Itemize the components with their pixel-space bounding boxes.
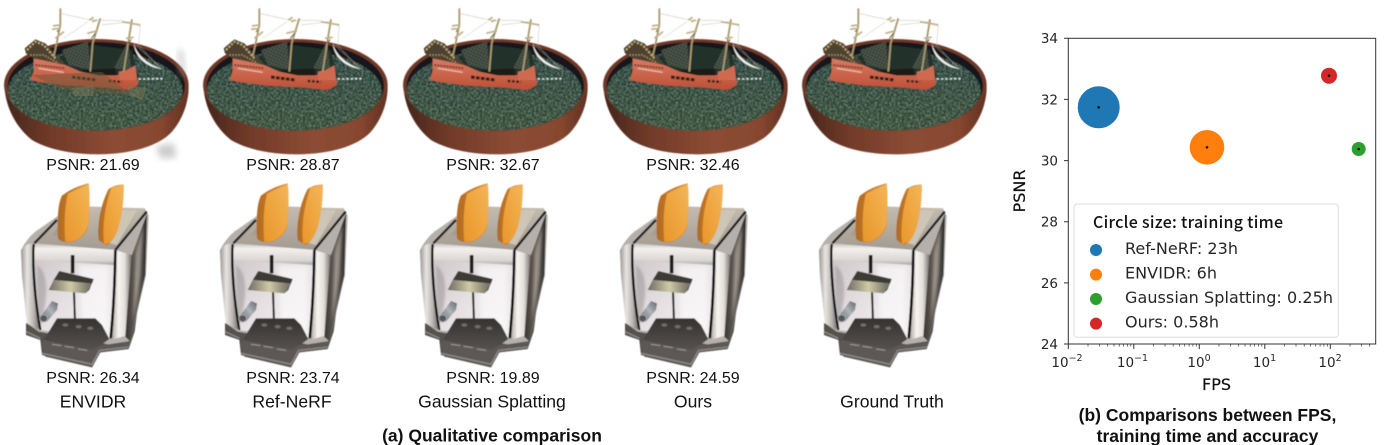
- y tick labels: 28: [1041, 214, 1058, 230]
- y tick labels: 24: [1041, 337, 1058, 353]
- x tick labels: [1051, 353, 1342, 371]
- y tick labels: 30: [1041, 154, 1058, 170]
- PSNR labels: toaster row: [46, 370, 740, 387]
- toaster render: Ref-NeRF: [220, 183, 348, 367]
- toaster render: Gaussian Splatting: [420, 183, 548, 367]
- PSNR labels: toaster row: PSNR: 19.89: [446, 370, 540, 387]
- y tick labels: [1041, 31, 1058, 353]
- legend: [1074, 204, 1338, 337]
- y axis title: PSNR: [1010, 170, 1029, 212]
- PSNR labels: ship row: PSNR: 28.87: [246, 157, 340, 174]
- x tick labels: 10: [1253, 355, 1270, 371]
- ship render: Ours: [603, 8, 788, 154]
- legend title: Circle size: training time: [1093, 209, 1283, 233]
- method name labels: Ours: [674, 392, 712, 412]
- caption (a): (a) Qualitative comparison: [382, 426, 602, 445]
- PSNR labels: toaster row: PSNR: 23.74: [246, 370, 340, 387]
- ship render: ENVIDR: [4, 8, 189, 158]
- PSNR labels: ship row: [46, 157, 740, 174]
- x tick labels: 10: [1318, 355, 1336, 371]
- PSNR labels: ship row: PSNR: 32.67: [446, 157, 540, 174]
- toaster render: ENVIDR: [21, 183, 149, 367]
- x tick labels: 10: [1187, 355, 1205, 371]
- legend item: Ours: Ours: 0.58h: [1125, 312, 1219, 332]
- y tick labels: 32: [1041, 92, 1058, 108]
- ship render: Ground Truth: [802, 8, 987, 154]
- point: ENVIDR: [1190, 130, 1224, 165]
- x tick labels: 10: [1117, 355, 1134, 371]
- PSNR labels: toaster row: PSNR: 24.59: [646, 370, 740, 387]
- x axis title: FPS: [1202, 375, 1231, 394]
- legend item: ENVIDR: ENVIDR: 6h: [1125, 264, 1217, 282]
- legend item: Ref-NeRF: Ref-NeRF: 23h: [1125, 239, 1238, 258]
- toaster render: Ground Truth: [819, 183, 947, 367]
- legend item: Gaussian Splatting: Gaussian Splatting: 0.25h: [1125, 288, 1333, 307]
- y tick labels: 34: [1041, 31, 1058, 47]
- x tick labels: 0: [1205, 353, 1211, 364]
- method name labels: [60, 392, 944, 412]
- toaster render: Ours: [620, 183, 748, 367]
- method name labels: Ground Truth: [840, 392, 944, 412]
- method name labels: Gaussian Splatting: [418, 392, 566, 412]
- ship render: Ref-NeRF: [203, 8, 388, 154]
- x tick labels: 1: [1270, 353, 1276, 364]
- PSNR labels: toaster row: PSNR: 26.34: [46, 370, 140, 387]
- caption (b): [1079, 405, 1336, 445]
- method name labels: ENVIDR: [60, 392, 126, 412]
- PSNR labels: ship row: PSNR: 32.46: [646, 157, 740, 174]
- PSNR labels: ship row: PSNR: 21.69: [46, 157, 140, 174]
- point: Gaussian Splatting: [1352, 142, 1366, 156]
- point: Ours: [1321, 68, 1337, 84]
- x tick labels: 2: [1336, 353, 1342, 364]
- x tick labels: −2: [1069, 353, 1083, 364]
- method name labels: Ref-NeRF: [252, 392, 332, 412]
- plot frame: [1068, 38, 1376, 344]
- caption (b): (b) Comparisons between FPS,: [1079, 405, 1336, 425]
- x tick labels: 10: [1051, 355, 1069, 371]
- axis ticks: [1064, 38, 1370, 349]
- ship render: Gaussian Splatting: [403, 8, 588, 154]
- x tick labels: −1: [1134, 353, 1148, 364]
- reconstruction artifacts: [32, 48, 185, 158]
- point: Ref-NeRF: [1078, 86, 1120, 128]
- scatter chart: [1010, 31, 1376, 394]
- y tick labels: 26: [1041, 276, 1058, 292]
